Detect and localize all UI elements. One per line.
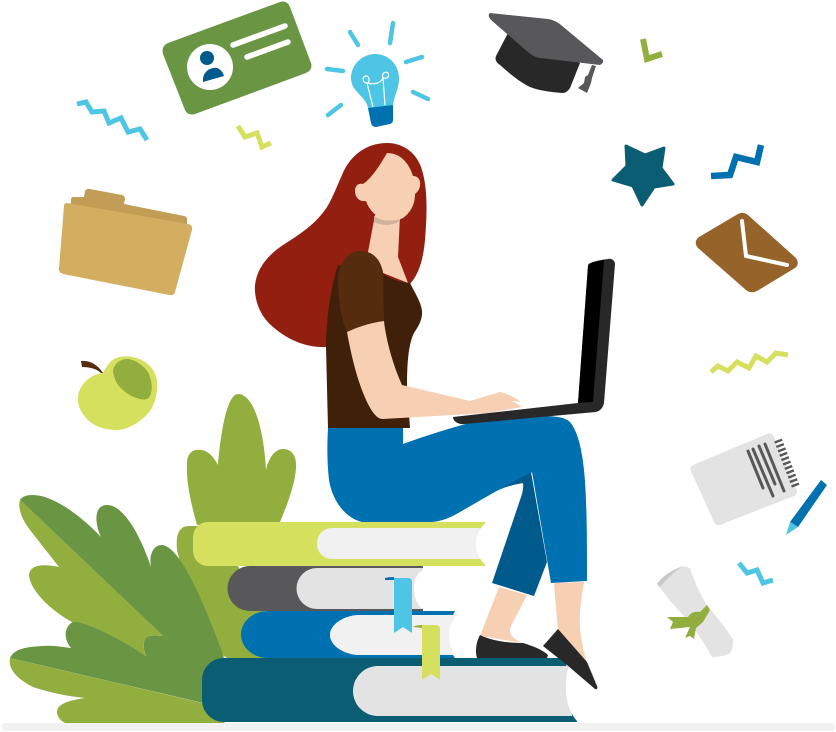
leg: front	[554, 582, 587, 663]
book stack	[193, 518, 600, 722]
zigzag: blue right	[711, 145, 761, 176]
shoe: front	[543, 629, 597, 689]
icon: ID card	[163, 2, 311, 114]
plant: dark leaves	[10, 495, 225, 723]
zigzag: light blue left	[77, 102, 147, 140]
icon: graduation cap	[489, 13, 603, 93]
zigzag: light blue bottom right	[739, 563, 773, 583]
jeans: back leg	[492, 472, 547, 596]
leg: back	[480, 587, 527, 643]
woman	[255, 143, 615, 689]
neck	[368, 215, 408, 283]
icon: light bulb	[327, 23, 428, 127]
sleeve	[338, 251, 384, 332]
zigzag: olive check	[643, 39, 662, 59]
plant: light leaf half	[19, 500, 163, 656]
icon: diploma	[657, 566, 733, 657]
book: blue	[241, 611, 470, 658]
plant: bottom light leaf	[10, 658, 225, 723]
zigzag: lime top	[238, 126, 271, 147]
laptop: screen	[578, 260, 604, 403]
icon: folder	[59, 189, 192, 295]
laptop: body	[453, 259, 615, 424]
book: lime	[193, 518, 524, 570]
arm	[347, 321, 522, 419]
icon: pencil	[786, 480, 827, 535]
shoe: back	[476, 635, 548, 658]
bookmark: light blue	[385, 577, 412, 633]
icon: notepad	[690, 433, 797, 525]
icon: apple	[78, 356, 157, 430]
top	[326, 265, 422, 428]
laptop	[453, 259, 615, 424]
jeans: front leg and thigh	[327, 416, 587, 583]
face	[355, 153, 420, 220]
icon: envelope	[696, 213, 798, 292]
book: grey	[228, 566, 450, 611]
hair	[255, 143, 427, 347]
zigzag: lime right	[711, 353, 788, 372]
plant: upper olive leaves	[177, 394, 296, 660]
neck shadow	[374, 216, 400, 225]
ground strip	[2, 723, 835, 731]
bookmark: lime	[413, 625, 440, 680]
icon: star	[613, 146, 673, 205]
book: teal	[202, 658, 600, 722]
